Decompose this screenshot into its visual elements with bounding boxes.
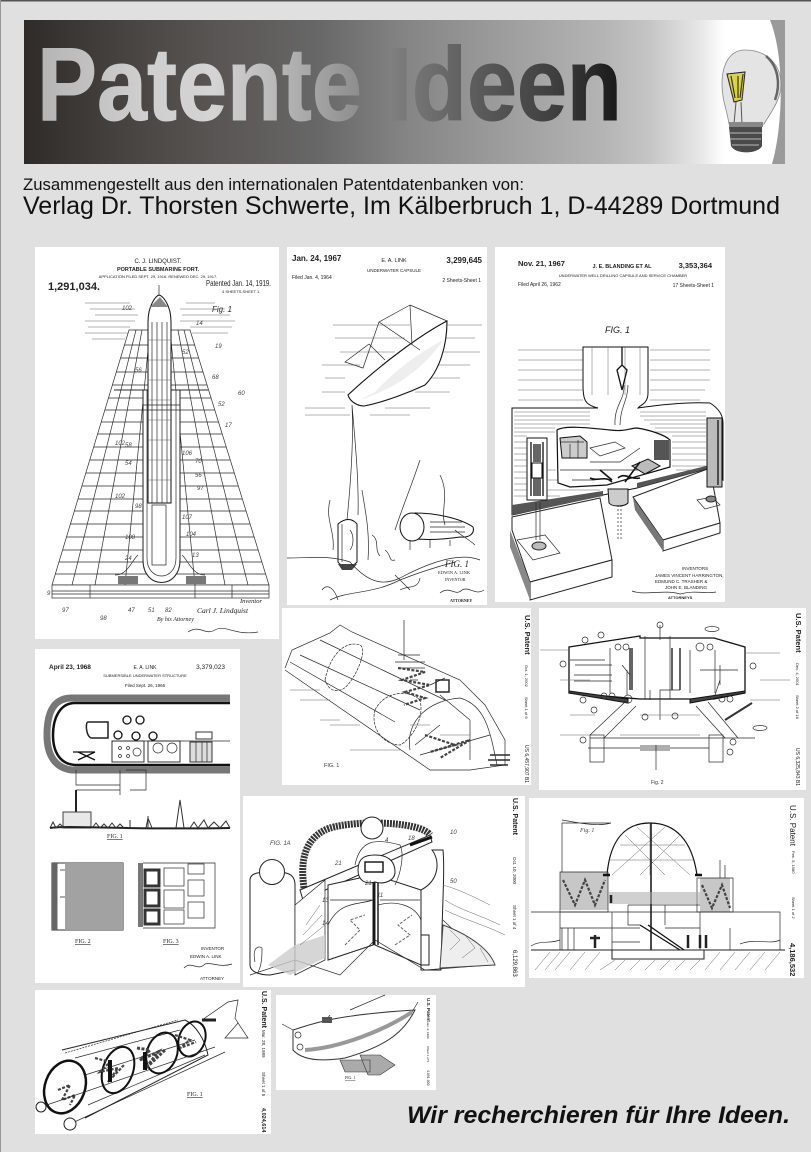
patent side header: [511, 798, 518, 977]
seabed and plants: [287, 460, 480, 600]
patent header text: [48, 259, 271, 314]
habitat tube drawing: [285, 620, 510, 770]
reference numbers and signature: 52: [182, 350, 189, 356]
left tube: [527, 438, 547, 500]
reference numbers and signature: [47, 306, 262, 633]
shelter drawing: 21: [364, 881, 372, 887]
panel: underwater capsule patent: [287, 247, 487, 605]
reference numbers and signature: Inventor: [239, 598, 262, 605]
figure label: FIG. 1: [324, 763, 339, 769]
patent side header: Oct. 1, 2002: [524, 665, 529, 688]
reference numbers and signature: 58: [125, 443, 132, 449]
figure label and signature: [438, 559, 484, 603]
reference numbers and signature: 102: [115, 441, 126, 447]
dome building section: [531, 820, 785, 970]
reference numbers and signature: 102: [122, 306, 133, 312]
patent header text: 4 SHEETS-SHEET 1.: [222, 289, 260, 294]
reference numbers and signature: 60: [238, 391, 245, 397]
patent header text: 1,291,034.: [48, 281, 100, 293]
patent header text: UNDERWATER WELL DRILLING CAPSULE AND SERVICE CHAMBER: [559, 273, 687, 278]
patent header text: 3,379,023: [196, 664, 225, 671]
patent header text: Fig. 1: [212, 305, 232, 314]
submarine drawing: [282, 995, 418, 1080]
patent header text: 17 Sheets-Sheet 1: [673, 283, 714, 289]
dome building section: Fig. 1: [579, 828, 594, 834]
panel: well servicing capsule patent: [495, 247, 725, 602]
patent side header: [788, 805, 797, 976]
patent side header: Sheet 1 of 5: [426, 1046, 430, 1063]
shelter drawing: FIG. 1A: [270, 841, 291, 847]
shelter drawing: 18: [408, 836, 415, 842]
reference numbers and signature: 102: [115, 494, 126, 500]
slogan: Wir recherchieren für Ihre Ideen.: [407, 1102, 790, 1129]
wellhead: [608, 489, 628, 506]
shelter drawing: 11: [377, 893, 383, 899]
patent side header: U.S. Patent: [523, 615, 532, 655]
shaft and block: [512, 347, 723, 515]
patent header text: E. A. LINK: [133, 665, 157, 671]
patent side header: Sheet 1 of 6: [524, 697, 529, 719]
patent side header: US 6,325,843 B1: [794, 748, 800, 786]
patent header text: Filed Sept. 26, 1966: [125, 683, 166, 688]
ship hull: [345, 305, 447, 406]
patent side header: [426, 998, 431, 1086]
reference numbers and signature: 107: [182, 515, 193, 521]
reference numbers and signature: 97: [62, 608, 69, 614]
water lines: [305, 325, 482, 415]
chamber: [557, 427, 670, 487]
patent side header: Oct. 10, 2000: [512, 857, 517, 885]
cylindrical habitat drawing: FIG. 1: [187, 1092, 203, 1098]
patent side header: U.S. Patent: [426, 998, 431, 1022]
patent header text: Filed Jan. 4, 1964: [292, 275, 332, 281]
patent side header: US 6,457,907 B1: [523, 745, 529, 783]
water lines: [518, 350, 710, 400]
figure label: Fig. 2: [651, 780, 664, 786]
title: Patente Ideen: [37, 26, 622, 142]
habitat section drawing: [540, 622, 790, 770]
inventor block: ATTORNEYS: [668, 595, 693, 600]
reference numbers and signature: 56: [135, 368, 142, 374]
submarine drawing: FIG. 1: [345, 1075, 355, 1080]
figure label and signature: ATTORNEY: [450, 598, 472, 603]
patent header text: Filed April 26, 1962: [518, 282, 561, 288]
right tube: [707, 418, 722, 487]
inventor block: ATTORNEY: [200, 976, 224, 981]
fort base grid: [40, 330, 280, 598]
reference numbers and signature: 98: [100, 616, 107, 622]
reference numbers and signature: 52: [218, 402, 225, 408]
subtitle line: Zusammengestellt aus den internationalen Patentdatenbanken von:: [23, 176, 524, 194]
reference numbers and signature: 19: [215, 344, 222, 350]
patent header text: 3,299,645: [446, 256, 483, 265]
patent side header: Mar. 28, 1989: [261, 1030, 266, 1058]
inventor block: EDMUND C. TRASHER &: [655, 579, 707, 584]
patent side header: [523, 615, 532, 783]
reference numbers and signature: 13: [192, 553, 199, 559]
patent side header: [794, 613, 803, 786]
inventor block: [632, 566, 724, 600]
patent side header: [260, 991, 267, 1133]
reference numbers and signature: 108: [125, 535, 136, 541]
icon: light bulb: [722, 50, 781, 152]
figure 3 cell wall: [138, 863, 215, 945]
patent header text: J. E. BLANDING ET AL: [592, 264, 652, 270]
patent header text: C. J. LINDQUIST.: [134, 259, 182, 265]
patent side header: 4,186,532: [788, 943, 797, 976]
patent side header: U.S. Patent: [511, 798, 518, 836]
figure 1 habitat section: FIG. 1: [107, 834, 123, 840]
reference numbers and signature: 24: [124, 556, 132, 562]
patent header text: [518, 259, 714, 335]
patent header text: 2 Sheets-Sheet 1: [442, 278, 481, 284]
patent header text: FIG. 1: [605, 325, 630, 335]
panel: submarine patent: [276, 995, 436, 1090]
panel: legged habitat patent: [539, 608, 806, 790]
patent side header: Sheet 1 of 4: [512, 905, 517, 930]
shelter drawing: 14: [322, 921, 329, 927]
reference numbers and signature: Carl J. Lindquist: [197, 606, 249, 615]
inventor block: INVENTORS: [682, 566, 708, 571]
inventor block: JOHN E. BLANDING: [665, 585, 708, 590]
shelter drawing: 13: [322, 898, 329, 904]
well capsule structure: [510, 347, 723, 600]
reference numbers and signature: 70: [195, 459, 202, 465]
patent header text: PORTABLE SUBMARINE FORT.: [117, 267, 200, 273]
figure 2 mesh wall: FIG. 2: [75, 939, 91, 945]
patent header text: [49, 664, 225, 688]
patent header text: 3,353,364: [679, 261, 713, 270]
patent side header: 4,891,000: [426, 1070, 430, 1086]
panel: portable submarine fort patent: [35, 247, 280, 639]
figure label and signature: FIG. 1: [444, 559, 469, 569]
figure label and signature: INVENTOR: [445, 577, 466, 582]
panel: submerged installation patent: [35, 649, 240, 983]
reference numbers and signature: 14: [196, 321, 203, 327]
reference numbers and signature: 17: [225, 423, 232, 429]
patent side header: Dec. 4, 2001: [795, 663, 800, 686]
patent header text: APPLICATION FILED SEPT. 29, 1916. RENEWED DEC. 29, 1917.: [99, 274, 217, 279]
shelter drawing: 4: [385, 838, 389, 844]
seabed habitat: [400, 513, 473, 550]
inventor block: INVENTOR: [201, 946, 225, 951]
figure 2 mesh wall: [52, 863, 123, 945]
reference numbers and signature: 82: [165, 608, 172, 614]
panel: geodesic dome patent: [529, 798, 804, 978]
figure 1 habitat section: [47, 698, 230, 840]
patent side header: 6,129,863: [511, 950, 517, 977]
panel: tube habitat patent: [282, 608, 532, 785]
shelter drawing: [250, 817, 505, 975]
patent header text: UNDERWATER CAPSULE: [367, 268, 421, 273]
reference numbers and signature: 106: [182, 451, 193, 457]
reference numbers and signature: 54: [125, 461, 132, 467]
reference numbers and signature: 68: [212, 375, 219, 381]
patent side header: Sheet 1 of 2: [791, 897, 796, 919]
inventor block: JAMES VINCENT HARRINGTON,: [655, 573, 724, 578]
patent header text: Patented Jan. 14, 1919.: [206, 279, 271, 288]
reference numbers and signature: 47: [128, 608, 135, 614]
panel: underground dome shelter patent: [243, 796, 525, 987]
cylindrical habitat drawing: [36, 1000, 248, 1130]
seabed capsule: [338, 520, 357, 570]
patent header text: [292, 254, 483, 284]
reference numbers and signature: 104: [186, 532, 197, 538]
fort tower: [115, 285, 206, 584]
patent side header: Jan. 2, 1990: [426, 1022, 430, 1039]
patent side header: U.S. Patent: [788, 805, 797, 847]
patent header text: SUBMERSIBLE UNDERWATER STRUCTURE: [103, 673, 187, 678]
patent side header: 4,024,614: [260, 1108, 266, 1133]
reference numbers and signature: By his Attorney: [157, 617, 194, 623]
publisher address: Verlag Dr. Thorsten Schwerte, Im Kälberbruch 1, D-44289 Dortmund: [23, 192, 780, 220]
reference numbers and signature: 98: [135, 504, 142, 510]
patent side header: Sheet 1 of 5: [261, 1072, 266, 1097]
inventor block: [184, 946, 232, 981]
panel: cylinder habitat patent: [35, 990, 271, 1134]
seabed slabs: [510, 468, 720, 600]
patent side header: Sheet 2 of 16: [795, 695, 800, 720]
patent side header: U.S. Patent: [260, 991, 267, 1029]
shelter drawing: 10: [450, 830, 457, 836]
patent header text: Jan. 24, 1967: [292, 254, 342, 263]
shelter drawing: 21: [334, 861, 342, 867]
patent side header: Feb. 5, 1980: [791, 851, 796, 874]
patent header text: April 23, 1968: [49, 664, 91, 671]
reference numbers and signature: 51: [148, 608, 155, 614]
patent header text: Nov. 21, 1967: [518, 259, 565, 268]
figure label and signature: EDWIN A. LINK: [438, 570, 471, 575]
patent side header: U.S. Patent: [794, 613, 803, 653]
patent header text: E. A. LINK: [381, 258, 407, 264]
reference numbers and signature: 9: [47, 591, 51, 597]
reference numbers and signature: 97: [197, 486, 204, 492]
figure 3 cell wall: FIG. 3: [163, 939, 179, 945]
water surface: [85, 303, 235, 339]
reference numbers and signature: 56: [195, 473, 202, 479]
tether cable: [347, 405, 368, 560]
header banner: [24, 20, 785, 164]
shelter drawing: 50: [450, 879, 457, 885]
inventor block: EDWIN A. LINK: [190, 954, 222, 959]
